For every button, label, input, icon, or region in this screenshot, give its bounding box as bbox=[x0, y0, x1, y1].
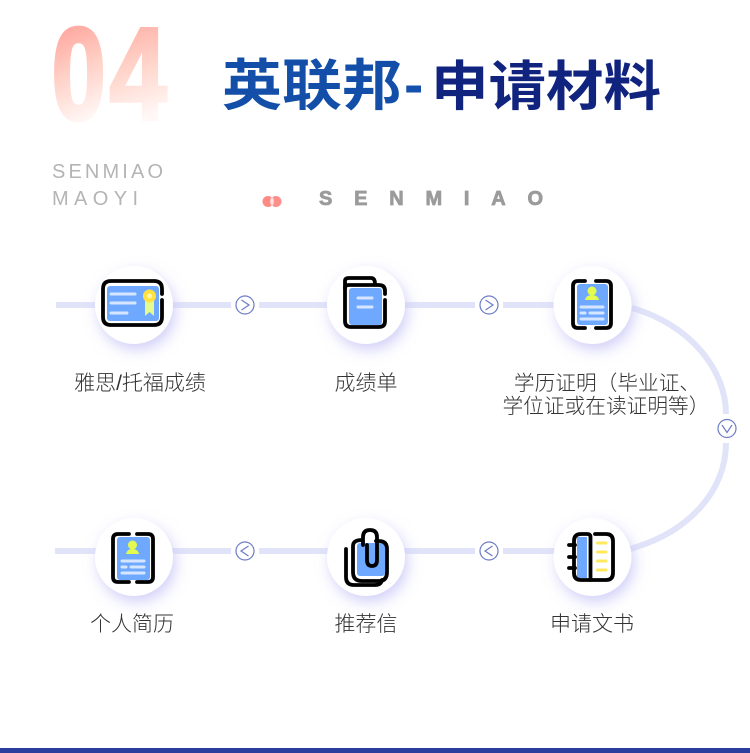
icon: notebook bbox=[554, 518, 632, 596]
icon: certificate bbox=[95, 266, 173, 344]
section number 04 bbox=[52, 0, 167, 148]
connector: top row bbox=[56, 302, 561, 308]
brand text: SENMIAO MAOYI: MAOYI bbox=[52, 188, 138, 210]
label: 推荐信 bbox=[334, 613, 398, 636]
arrow: right 2 bbox=[480, 296, 498, 314]
logo mark bbox=[262, 196, 282, 207]
icon: paper clip bbox=[327, 518, 405, 596]
section number 04: 4 bbox=[110, 1, 167, 148]
arrow: right 1 bbox=[236, 296, 254, 314]
title: 英联邦 bbox=[222, 56, 402, 118]
brand wordmark: SENMIAO bbox=[319, 188, 543, 210]
bottom bar bbox=[0, 748, 750, 753]
arrow: left 2 bbox=[236, 542, 254, 560]
icon: profile card bbox=[95, 518, 173, 596]
step: resume bbox=[90, 518, 174, 636]
connector: bottom row bbox=[55, 548, 561, 554]
label: 雅思/托福成绩 bbox=[74, 372, 206, 395]
title: 申请材料 bbox=[431, 57, 661, 117]
step: recommendation letter bbox=[327, 518, 405, 636]
step: education certificates bbox=[503, 266, 709, 418]
step: test scores bbox=[74, 266, 206, 395]
step: application documents bbox=[550, 518, 634, 636]
section number 04: 0 bbox=[52, 0, 106, 148]
icon: profile card bbox=[554, 266, 632, 344]
connector: curve on right bbox=[630, 308, 726, 549]
label: 个人简历 bbox=[90, 613, 174, 636]
arrow: left 1 bbox=[480, 542, 498, 560]
brand text: SENMIAO MAOYI bbox=[52, 161, 163, 210]
icon: book bbox=[327, 266, 405, 344]
title bbox=[222, 52, 661, 118]
brand text: SENMIAO MAOYI: SENMIAO bbox=[52, 161, 163, 183]
label: 学历证明（毕业证、 bbox=[514, 372, 700, 395]
step: transcript bbox=[327, 266, 405, 395]
label bbox=[503, 372, 709, 418]
label: 申请文书 bbox=[550, 613, 634, 636]
title: - bbox=[404, 52, 423, 117]
label: 学位证或在读证明等） bbox=[503, 395, 709, 418]
arrow: down bbox=[718, 420, 736, 438]
label: 成绩单 bbox=[334, 372, 398, 395]
